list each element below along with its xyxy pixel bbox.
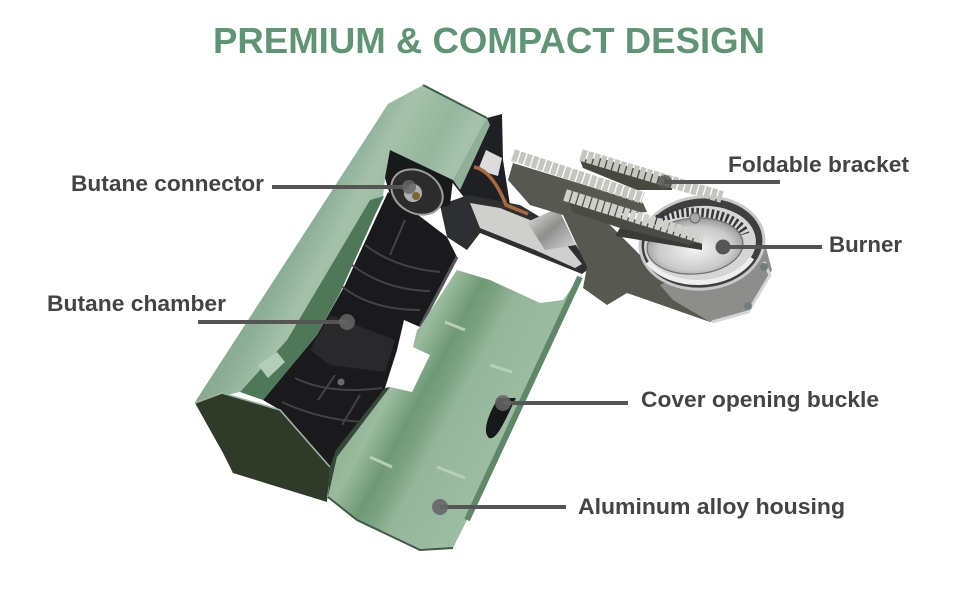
label: Burner: Burner [829, 232, 902, 257]
copper gas tube [474, 167, 528, 214]
label: Butane chamber [47, 291, 355, 330]
label: Cover opening buckle: Cover opening buckle [641, 387, 879, 412]
label: Aluminum alloy housing [432, 494, 845, 519]
label: Burner [716, 232, 902, 257]
butane chamber [263, 192, 457, 470]
rear black bracket [452, 114, 510, 205]
product: folding butane stove [195, 85, 772, 550]
stove body casting [508, 163, 710, 322]
butane connector fitting [383, 118, 490, 224]
label: Butane connector [71, 171, 416, 196]
burner assembly [636, 192, 772, 322]
cover opening buckle [486, 398, 516, 438]
label: Cover opening buckle [495, 387, 879, 412]
title: PREMIUM & COMPACT DESIGN [213, 20, 765, 61]
label: Foldable bracket [658, 152, 910, 189]
label: Butane connector: Butane connector [71, 171, 264, 196]
foldable bracket racks [513, 155, 722, 250]
label: Butane chamber: Butane chamber [47, 291, 226, 316]
metal chassis rail [440, 150, 590, 274]
opened green cover [328, 270, 583, 550]
upper green housing [195, 85, 487, 402]
label: Foldable bracket: Foldable bracket [728, 152, 910, 177]
label: Aluminum alloy housing: Aluminum alloy housing [578, 494, 845, 519]
end cap [195, 393, 330, 502]
